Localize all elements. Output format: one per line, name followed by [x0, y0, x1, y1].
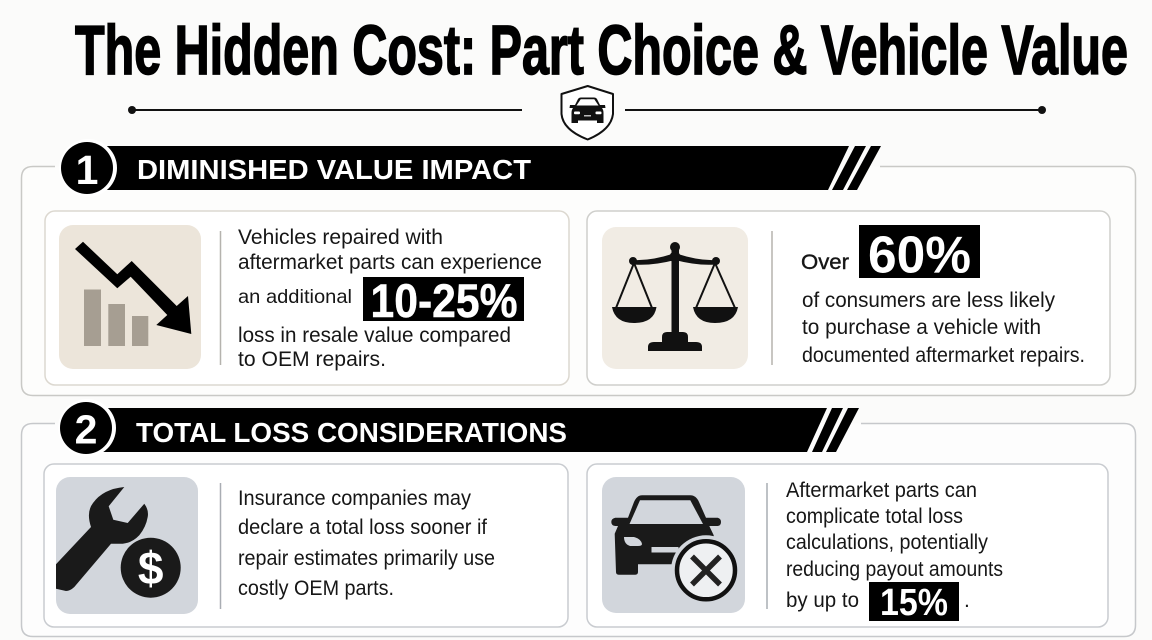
- stat: 60%: 60%: [868, 226, 971, 284]
- stat: 15%: 15%: [880, 582, 948, 624]
- card text: [786, 479, 1003, 624]
- stat: 10-25%: 10-25%: [370, 274, 518, 327]
- card text: aftermarket parts can experience: [238, 251, 542, 274]
- section number 2: 2: [75, 406, 97, 452]
- icon: balance scales: [602, 227, 748, 369]
- card text: by up to: [786, 589, 859, 612]
- panel: section 2 total loss considerations: [22, 399, 1136, 636]
- card text: [238, 226, 542, 371]
- card text: .: [964, 589, 970, 612]
- card text: costly OEM parts.: [238, 577, 394, 600]
- card: early total loss: [44, 464, 568, 627]
- section 2 heading: TOTAL LOSS CONSIDERATIONS: [136, 417, 567, 448]
- card text: Insurance companies may: [238, 487, 471, 510]
- panel: section 1 diminished value impact: [22, 139, 1136, 396]
- card text: Aftermarket parts can: [786, 479, 977, 502]
- icon: falling arrow and bars: [59, 225, 201, 369]
- section 2 header banner: [58, 399, 859, 457]
- section number 1: 1: [76, 147, 98, 193]
- card text: [801, 225, 1085, 367]
- section 1 header banner: [59, 139, 881, 197]
- card text: declare a total loss sooner if: [238, 516, 487, 539]
- card text: loss in resale value compared: [238, 324, 511, 347]
- icon: wrench and dollar coin: [56, 477, 198, 614]
- card: resale value loss: [45, 211, 569, 385]
- card text: an additional: [238, 286, 352, 308]
- icon: car with x mark: [602, 477, 745, 613]
- card text: [238, 487, 495, 600]
- section 1 heading: DIMINISHED VALUE IMPACT: [137, 154, 531, 185]
- card: consumer reluctance: [587, 211, 1110, 385]
- card text: of consumers are less likely: [802, 289, 1055, 312]
- card text: to OEM repairs.: [238, 348, 386, 371]
- card text: Over: [801, 251, 849, 274]
- title divider with shield car emblem: [128, 86, 1046, 140]
- card text: complicate total loss: [786, 505, 963, 528]
- icon: shield car: [562, 86, 613, 140]
- card: payout reduction: [587, 464, 1108, 627]
- card text: documented aftermarket repairs.: [802, 344, 1085, 367]
- icon: wrench and dollar coin: $: [138, 542, 163, 594]
- card text: to purchase a vehicle with: [802, 316, 1041, 339]
- card text: Vehicles repaired with: [238, 226, 443, 249]
- card text: calculations, potentially: [786, 531, 988, 554]
- card text: reducing payout amounts: [786, 558, 1003, 581]
- card text: repair estimates primarily use: [238, 547, 495, 570]
